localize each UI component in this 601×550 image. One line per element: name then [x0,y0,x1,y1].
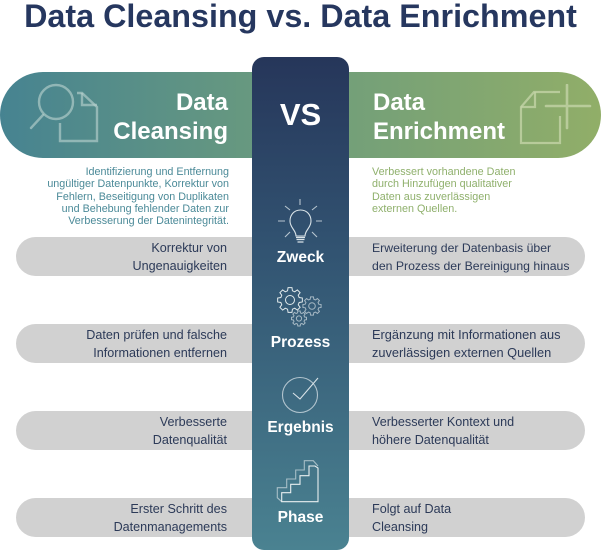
icon: document with plus [520,84,592,144]
description: Data Enrichment: Daten aus zuverlässigen [372,191,490,203]
header band: gradient pill [0,72,601,158]
row pill: Prozess [16,324,585,363]
description: Data Cleansing: ungültiger Datenpunkte, Korrektur von [47,178,229,190]
VS label: VS [280,97,321,132]
icon: stairs [276,460,319,502]
Phase left text [114,502,227,534]
description: Data Enrichment: Verbessert vorhandene Daten [372,166,515,178]
icon: magnifier and document [30,84,98,142]
Zweck left text [132,241,227,273]
Zweck left text: Ungenauigkeiten [132,259,227,273]
center column [252,57,349,550]
heading: Data Cleansing [113,89,228,144]
Phase label: Phase [278,509,323,526]
icon: light bulb [278,199,322,243]
row pill: Phase [16,498,585,537]
description: Data Enrichment: externen Quellen. [372,203,457,215]
Prozess left text [86,328,227,360]
Prozess left text: Informationen entfernen [93,346,227,360]
description: Data Cleansing [47,166,229,227]
description: Data Enrichment [372,166,515,215]
Zweck right text: Erweiterung der Datenbasis über [372,241,551,255]
heading: Data Cleansing: Data [176,89,228,116]
description: Data Cleansing: Verbesserung der Datenintegrität. [68,215,229,227]
Zweck right text: den Prozess der Bereinigung hinaus [372,259,570,273]
Zweck left text: Korrektur von [151,241,227,255]
description: Data Enrichment: durch Hinzufügen qualitativer [372,178,512,190]
Prozess right text: zuverlässigen externen Quellen [372,345,551,360]
heading: Data Enrichment [373,89,505,144]
Prozess right text [372,327,561,360]
icon: gears [277,287,322,326]
Zweck right text [372,241,570,273]
description: Data Cleansing: Identifizierung und Entfernung [86,166,229,178]
description: Data Cleansing: Fehlern, Beseitigung von Duplikaten [56,191,229,203]
Prozess right text: Ergänzung mit Informationen aus [372,327,561,342]
Phase right text [372,502,452,534]
heading: Data Enrichment: Enrichment [373,118,505,144]
Phase left text: Datenmanagements [114,520,227,534]
Ergebnis label: Ergebnis [267,419,334,436]
Ergebnis left text [153,415,227,447]
Zweck label: Zweck [277,249,324,266]
heading: Data Enrichment: Data [373,89,425,116]
Phase right text: Folgt auf Data [372,502,451,516]
Prozess left text: Daten prüfen und falsche [86,328,227,342]
row pill: Ergebnis [16,411,585,450]
description: Data Cleansing: und Behebung fehlender Daten zur [62,203,229,215]
Prozess label: Prozess [271,334,330,351]
heading: Data Cleansing: Cleansing [113,118,228,144]
Ergebnis right text [372,415,514,447]
row pill: Zweck [16,237,585,276]
Ergebnis left text: Datenqualität [153,433,227,447]
Ergebnis right text: höhere Datenqualität [372,433,489,447]
Phase right text: Cleansing [372,520,428,534]
Phase left text: Erster Schritt des [130,502,227,516]
Ergebnis left text: Verbesserte [160,415,227,429]
Ergebnis right text: Verbesserter Kontext und [372,415,514,429]
icon: check circle [282,377,318,413]
